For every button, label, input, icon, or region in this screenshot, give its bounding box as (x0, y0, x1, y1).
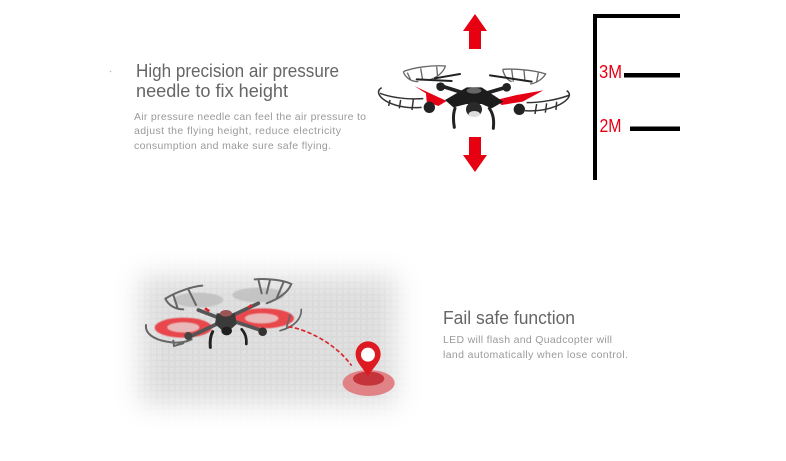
text block: fail safe description (443, 334, 628, 361)
heading: fail safe: Fail safe function (443, 308, 575, 328)
text block: air pressure description: consumption and make sure safe flying. (134, 140, 331, 152)
label: 2M: 2M (600, 116, 622, 136)
text block: air pressure description (134, 111, 366, 152)
heading: air pressure: High precision air pressure (136, 61, 339, 81)
text block: air pressure description: Air pressure needle can feel the air pressure to (134, 111, 366, 123)
heading: air pressure (136, 61, 339, 101)
arrow: down (463, 137, 487, 172)
icon: location pin on target (343, 341, 395, 396)
text block: air pressure description: adjust the flying height, reduce electricity (134, 125, 342, 137)
arrow: up (463, 14, 487, 49)
text block: fail safe description: LED will flash and Quadcopter will (443, 334, 612, 346)
dashed flight path (288, 327, 352, 366)
label: 3M: 3M (599, 62, 622, 82)
red wing: right (496, 90, 543, 105)
heading: air pressure: needle to fix height (136, 81, 288, 101)
icon: drone with red propellers (146, 279, 395, 396)
infographic canvas (110, 14, 680, 414)
panel: gray grid backdrop (130, 266, 406, 414)
text block: fail safe description: land automatically when lose control. (443, 349, 628, 361)
height scale (593, 14, 680, 180)
drone body (445, 87, 503, 108)
red wing: left (414, 86, 447, 106)
icon: black drone front view (379, 66, 570, 128)
decorative speck (110, 71, 111, 72)
